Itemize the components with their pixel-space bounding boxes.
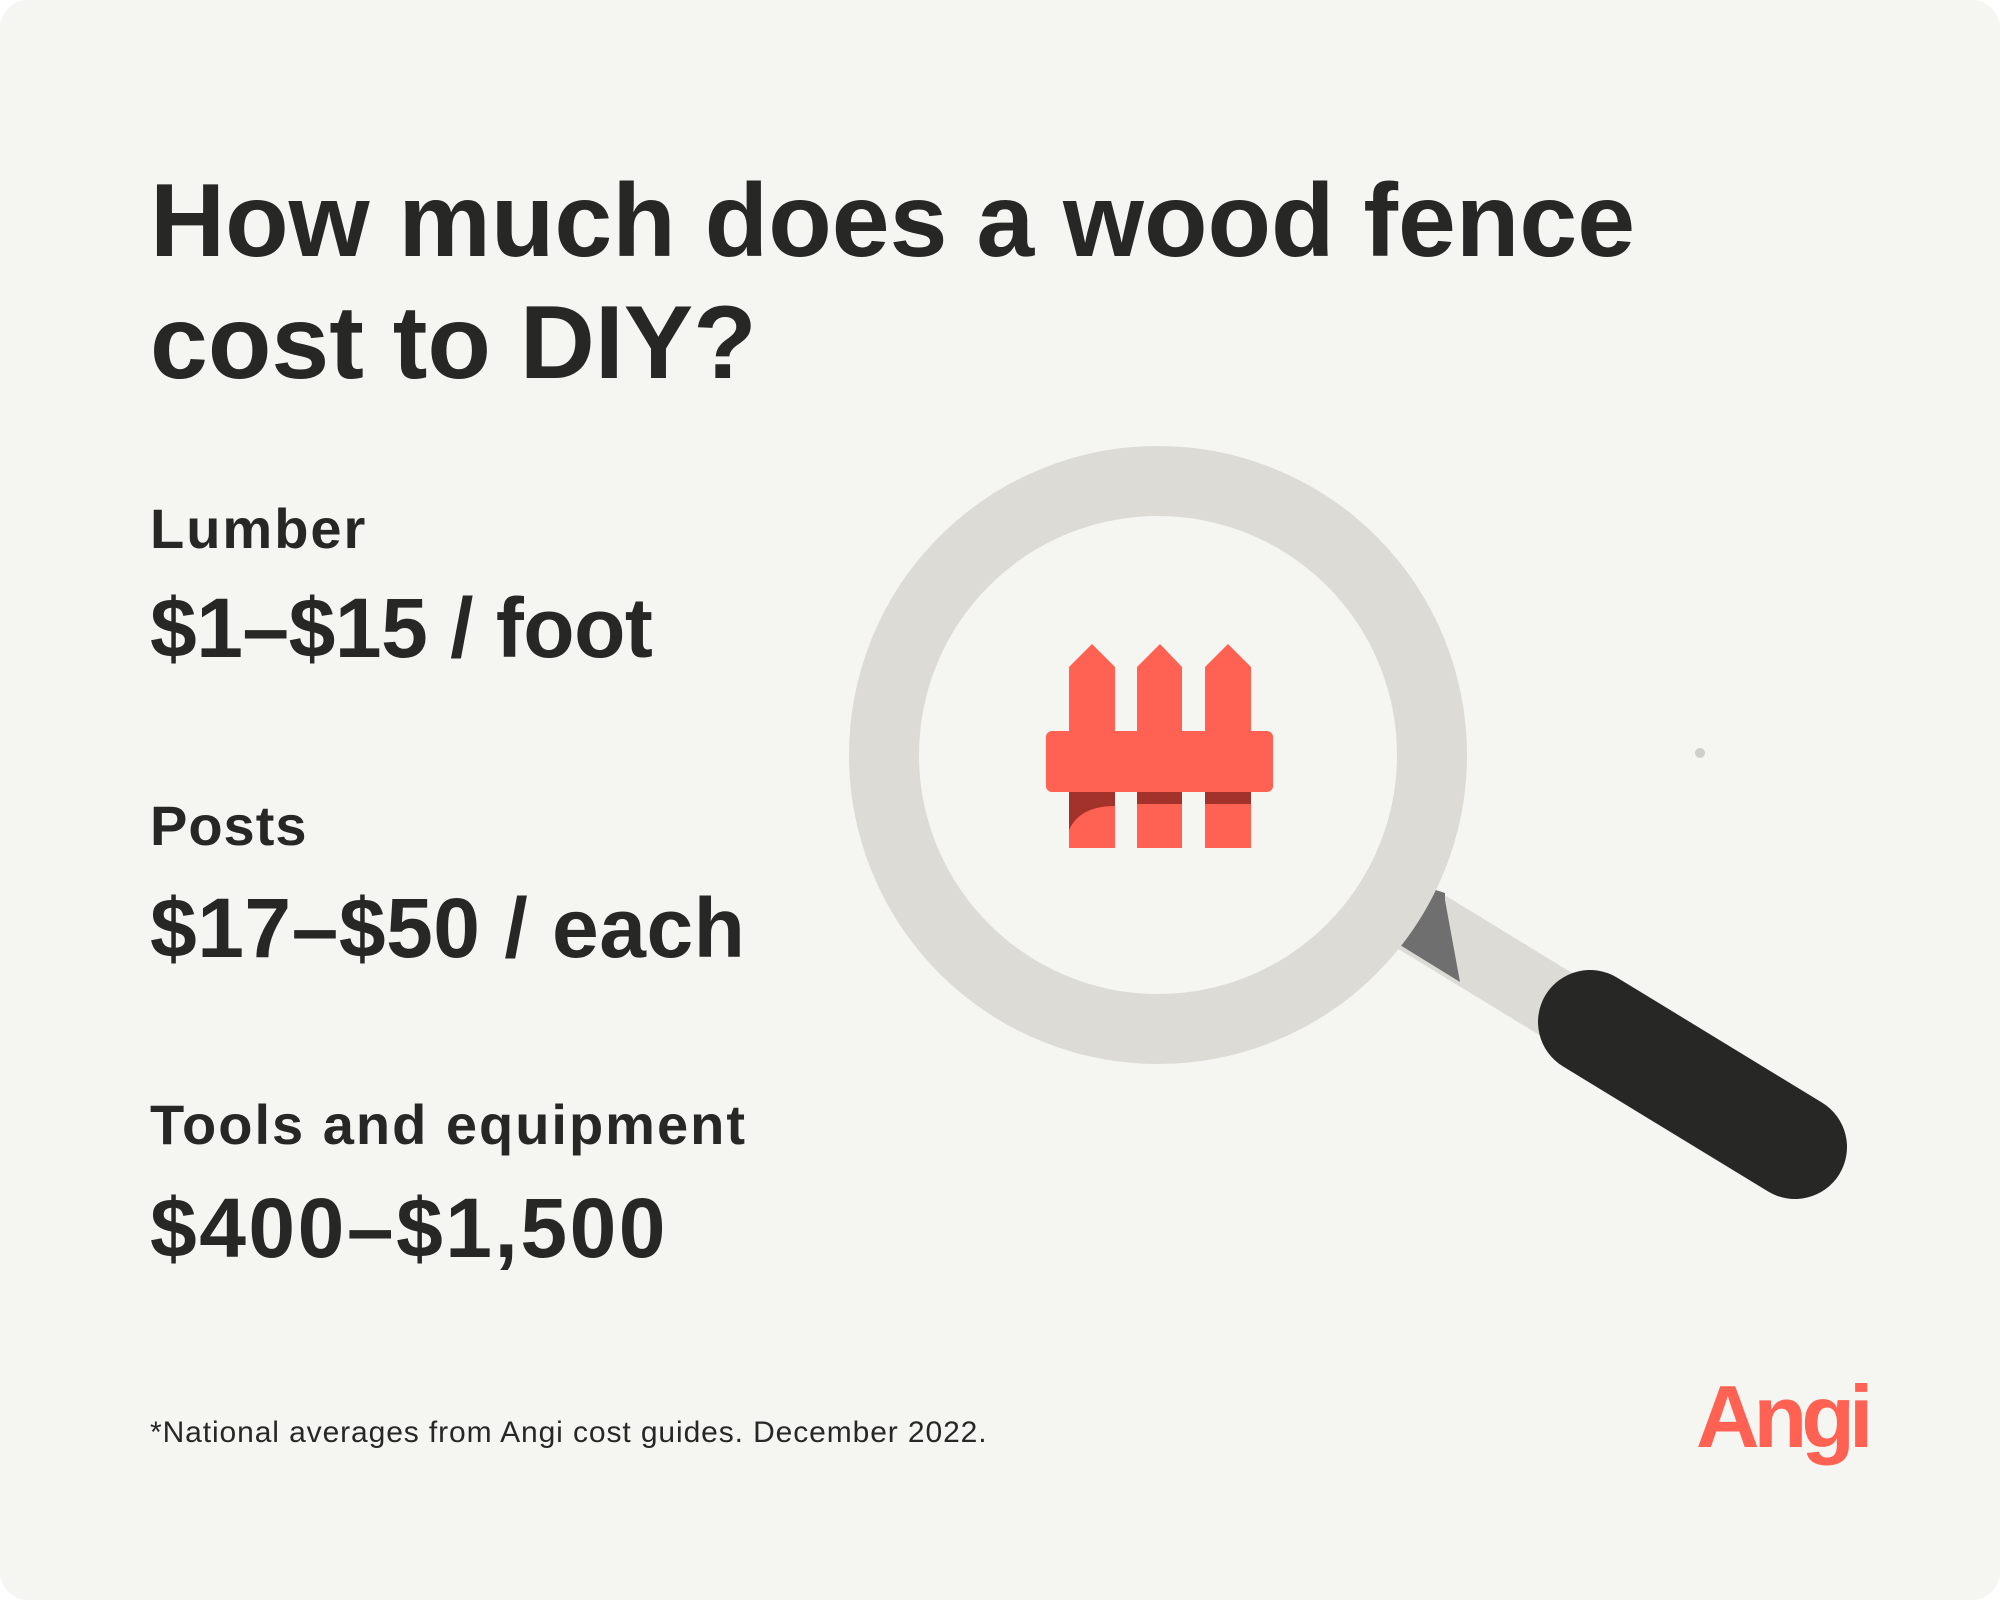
footnote: *National averages from Angi cost guides. December 2022. [150, 1416, 988, 1449]
label: tools: Tools and equipment [150, 1093, 747, 1156]
value: tools: $400–$1,500 [150, 1181, 668, 1275]
value: lumber: $1–$15 / foot [150, 581, 652, 675]
title: How much does a wood fence [150, 163, 1635, 279]
handle shaft [1400, 885, 1590, 1025]
dot [1695, 748, 1705, 758]
label: lumber: Lumber [150, 497, 367, 560]
label: posts: Posts [150, 794, 308, 857]
logo: Angi: Angi [1696, 1367, 1868, 1466]
icon: fence [1046, 644, 1273, 848]
title [150, 163, 1635, 401]
handle grip [1590, 1022, 1795, 1147]
lens ring [884, 481, 1432, 1029]
title: cost to DIY? [150, 285, 757, 401]
value: posts: $17–$50 / each [150, 881, 746, 975]
